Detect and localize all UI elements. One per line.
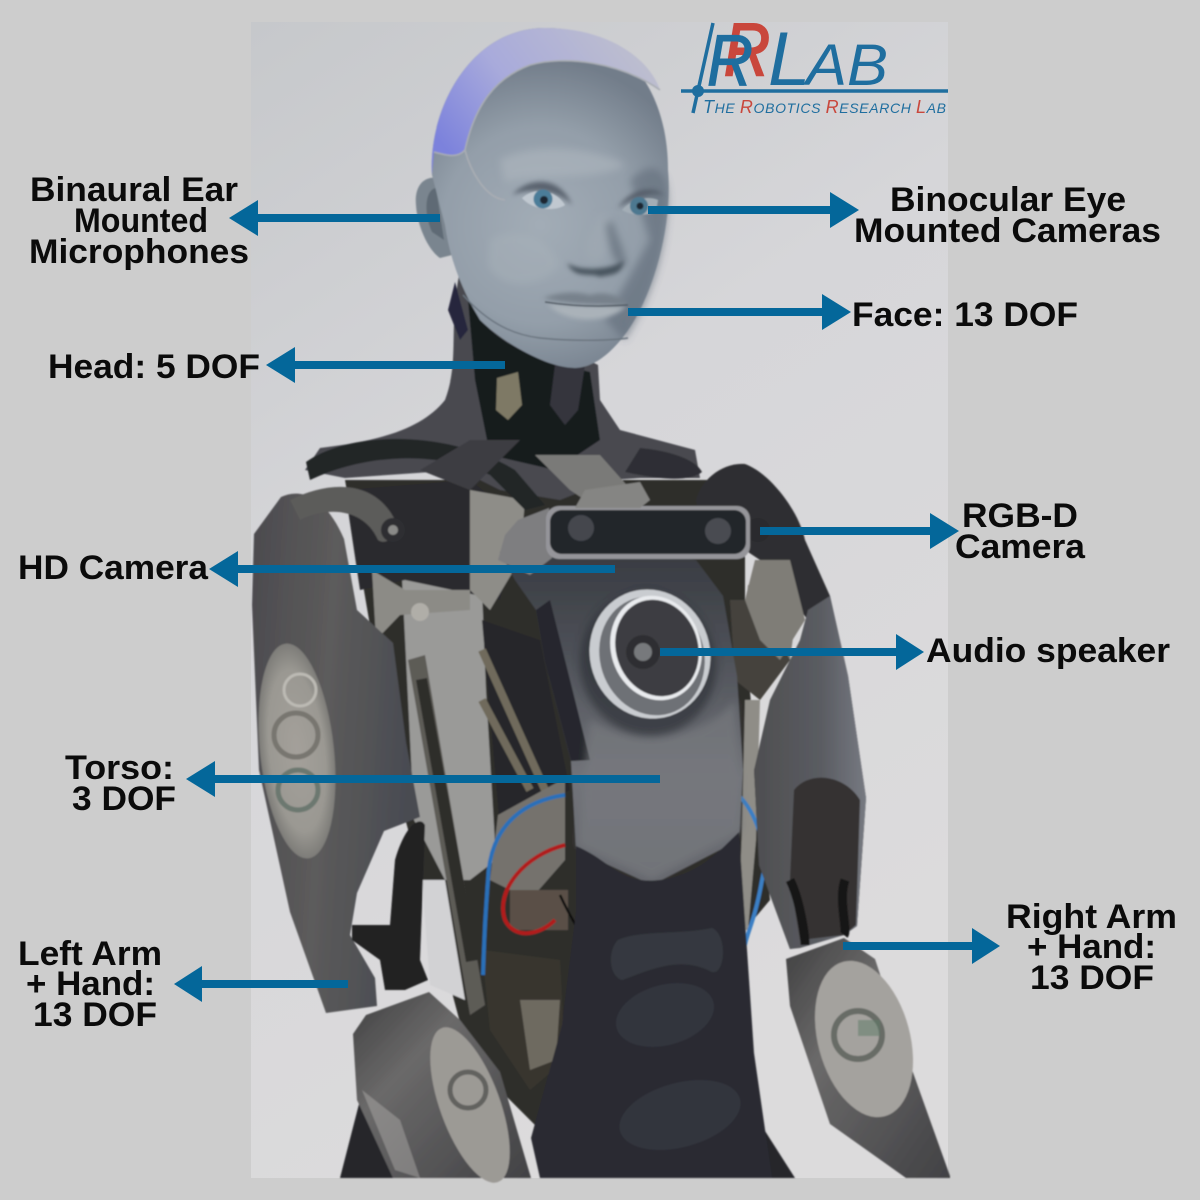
label: torso DOF bbox=[65, 749, 176, 818]
label: right arm and hand DOF: Right Arm bbox=[1006, 898, 1177, 936]
audio speaker bbox=[561, 574, 735, 753]
label: RGB-D camera: RGB-D bbox=[962, 497, 1078, 535]
label: head DOF: Head: 5 DOF bbox=[48, 348, 260, 386]
jaw seam bbox=[463, 295, 628, 340]
RGB-D camera bbox=[498, 482, 750, 575]
arrow: torso bbox=[186, 761, 660, 797]
arm lens bbox=[249, 640, 345, 862]
arrow: head bbox=[266, 347, 505, 383]
label: right arm and hand DOF: + Hand: bbox=[1027, 928, 1156, 966]
left upper arm shell bbox=[249, 487, 420, 1013]
label: binocular eye mounted cameras bbox=[854, 181, 1161, 250]
left elbow bracket bbox=[352, 821, 428, 990]
logo: RR Lab: AB bbox=[803, 33, 888, 98]
label: HD camera: HD Camera bbox=[18, 549, 209, 587]
label: left arm and hand DOF: 13 DOF bbox=[33, 996, 157, 1034]
eyes bbox=[522, 190, 658, 215]
logo: RR Lab: L bbox=[768, 17, 810, 102]
label: binocular eye mounted cameras: Binocular Eye bbox=[890, 181, 1126, 219]
label: left arm and hand DOF bbox=[18, 935, 162, 1034]
logo: RR Lab: THE ROBOTICS RESEARCH LAB bbox=[703, 97, 946, 117]
label: left arm and hand DOF: Left Arm bbox=[18, 935, 162, 973]
label: torso DOF: Torso: bbox=[65, 749, 174, 787]
arrow: audio speaker bbox=[660, 634, 924, 670]
right forearm bbox=[786, 938, 950, 1178]
label: left arm and hand DOF: + Hand: bbox=[26, 965, 155, 1003]
label: binocular eye mounted cameras: Mounted Cameras bbox=[854, 212, 1161, 250]
arrow: HD camera bbox=[209, 551, 615, 587]
robot photo illustration bbox=[249, 28, 950, 1192]
label: right arm and hand DOF bbox=[1006, 898, 1177, 997]
left forearm bbox=[353, 992, 531, 1192]
label: binaural ear mounted microphones: Binaural Ear bbox=[30, 171, 238, 209]
arrow: ear microphones bbox=[229, 200, 440, 236]
label: face DOF: Face: 13 DOF bbox=[852, 296, 1078, 334]
label: right arm and hand DOF: 13 DOF bbox=[1030, 959, 1154, 997]
label: binaural ear mounted microphones: Microphones bbox=[29, 233, 249, 271]
head bbox=[432, 28, 669, 368]
logo: RR Lab: R bbox=[707, 21, 753, 101]
interior mechanics bbox=[345, 480, 800, 1150]
hoses and cables bbox=[483, 795, 764, 1140]
arrow: right arm bbox=[843, 928, 1000, 964]
photo panel background bbox=[251, 22, 948, 1178]
mouth bbox=[543, 293, 630, 305]
label: RGB-D camera bbox=[955, 497, 1086, 566]
label: binaural ear mounted microphones bbox=[29, 171, 249, 271]
right upper arm bbox=[696, 464, 866, 949]
logo: RR Lab: R bbox=[724, 8, 770, 91]
hips bbox=[340, 1100, 795, 1178]
label: torso DOF: 3 DOF bbox=[72, 780, 176, 818]
nose bbox=[567, 215, 626, 277]
torso pad bbox=[531, 832, 772, 1178]
neck and collar bbox=[305, 270, 702, 510]
label: audio speaker: Audio speaker bbox=[926, 632, 1170, 670]
arrow: eye cameras bbox=[648, 192, 859, 228]
torso chest plate bbox=[500, 530, 743, 885]
label: binaural ear mounted microphones: Mounted bbox=[74, 202, 208, 240]
arrow: RGB-D camera bbox=[760, 513, 959, 549]
arrow: face bbox=[628, 294, 851, 330]
label: RGB-D camera: Camera bbox=[955, 528, 1086, 566]
logo: RR Lab bbox=[681, 8, 948, 117]
ear bbox=[416, 178, 452, 258]
illuminated skull cap bbox=[432, 28, 660, 175]
background gap near elbow bbox=[422, 880, 465, 1000]
arrow: left arm bbox=[174, 966, 348, 1002]
